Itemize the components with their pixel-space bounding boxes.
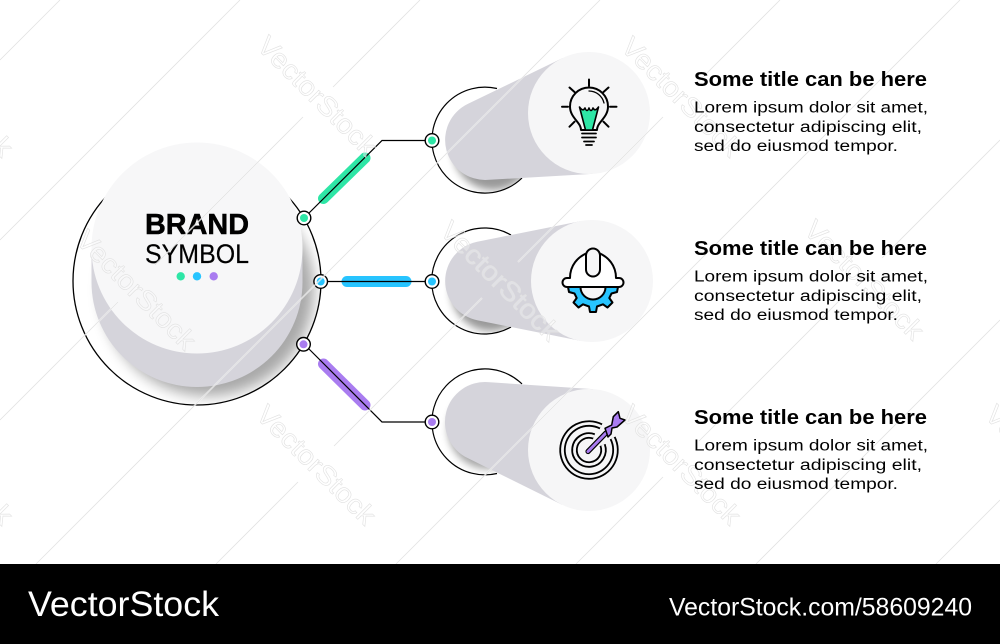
text block 1: consectetur adipiscing elit, — [694, 119, 922, 136]
brand label — [145, 209, 249, 269]
text block 3: consectetur adipiscing elit, — [694, 457, 922, 474]
text block 3: Lorem ipsum dolor sit amet, — [694, 438, 928, 454]
brand label: SYMBOL — [145, 239, 249, 269]
main brand circle — [72, 197, 322, 406]
text block 2: Some title can be here — [694, 238, 927, 260]
text block 1 — [694, 69, 928, 155]
watermarks: VectorStock — [70, 224, 202, 356]
connector: purple — [304, 344, 432, 422]
watermarks: VectorStock — [615, 31, 747, 163]
connector: blue — [321, 276, 432, 287]
watermarks: VectorStock — [798, 214, 930, 346]
text block 3 — [694, 407, 928, 493]
item 2 cylinder — [432, 220, 653, 342]
watermarks — [0, 30, 1000, 531]
footer bar: VectorStock.com/58609240 — [669, 594, 972, 622]
watermarks: VectorStock — [615, 399, 747, 531]
item 1 cylinder — [432, 52, 650, 193]
watermarks: VectorStock — [434, 215, 566, 347]
nodes on main circle and item circles — [297, 134, 439, 429]
connector: green — [304, 140, 432, 218]
text block 2: sed do eiusmod tempor. — [694, 307, 898, 324]
text block 1: Some title can be here — [694, 69, 927, 91]
text block 3: sed do eiusmod tempor. — [694, 476, 898, 493]
text block 2: consectetur adipiscing elit, — [694, 288, 922, 305]
watermarks: VectorStock — [251, 30, 383, 162]
icon: light bulb — [562, 80, 616, 145]
brand colour dots — [176, 272, 218, 280]
text block 1: sed do eiusmod tempor. — [694, 138, 898, 155]
text block 2 — [694, 238, 928, 324]
icon: target and arrow — [562, 412, 625, 477]
brand label: BRAND — [145, 209, 249, 241]
footer bar — [0, 564, 1000, 644]
item 3 cylinder — [432, 369, 650, 511]
text block 1: Lorem ipsum dolor sit amet, — [694, 100, 928, 116]
icon: helmet and gear — [562, 248, 624, 312]
text block 3: Some title can be here — [694, 407, 927, 429]
footer bar: VectorStock — [28, 585, 220, 624]
watermarks: VectorStock — [250, 399, 382, 531]
text block 2: Lorem ipsum dolor sit amet, — [694, 268, 928, 286]
